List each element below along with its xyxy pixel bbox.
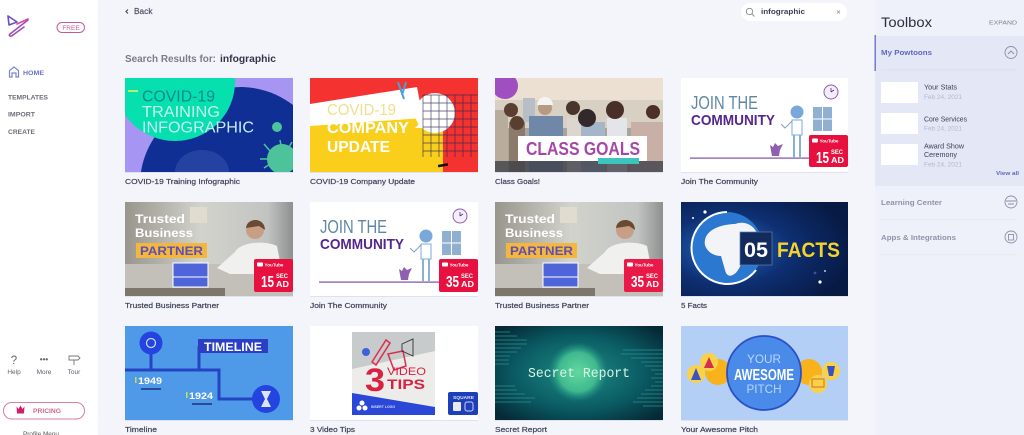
card: Trusted Business Partner 15: Trusted	[135, 212, 185, 226]
label: Your Awesome Pitch	[681, 425, 758, 434]
card: 5 Facts: 05	[744, 239, 768, 262]
card: Trusted Business Partner 35: PARTNER	[510, 244, 573, 258]
card: Secret Report: Secret Report	[528, 367, 630, 382]
section: my powtoons: My Powtoons	[881, 48, 932, 57]
section: apps and integrations	[881, 231, 1017, 243]
card: COVID-19 Training Infographic: INFOGRAPHIC	[142, 120, 254, 136]
card: Join The Community 15	[681, 78, 848, 186]
card: Trusted Business Partner 35: Business	[505, 226, 563, 240]
nav: create: CREATE	[8, 129, 36, 136]
panel: toolbox	[874, 0, 1024, 435]
heading: toolbox: Toolbox	[881, 15, 932, 30]
item: award show ceremony: Award Show	[924, 144, 965, 150]
card: Your Awesome Pitch	[681, 326, 848, 434]
card: Trusted Business Partner 15	[125, 202, 293, 310]
nav: home: HOME	[23, 70, 45, 77]
card: Trusted Business Partner 35: 35	[631, 274, 644, 291]
free badge	[57, 22, 84, 32]
card: Trusted Business Partner 15: PARTNER	[140, 244, 203, 258]
card: Your Awesome Pitch: AWESOME	[734, 367, 794, 384]
pricing button	[4, 402, 84, 419]
section: my powtoons	[874, 35, 1024, 186]
card: 3 Video Tips: VIDEO	[387, 366, 427, 378]
heading: search results: infographic	[220, 54, 276, 65]
card: Join The Community 15: COMMUNITY	[691, 112, 775, 129]
back link	[126, 7, 154, 16]
search box	[741, 3, 847, 21]
card: 3 Video Tips: SQUARE	[453, 395, 474, 400]
item: award show ceremony: Feb 24, 2021	[924, 162, 963, 168]
card: Join The Community 35: JOIN THE	[320, 217, 387, 237]
card: Join The Community 35: 35	[446, 274, 459, 291]
view all link: View all	[996, 171, 1019, 177]
pricing button: PRICING	[33, 408, 61, 415]
icon: logo	[8, 16, 28, 36]
card: COVID-19 Company Update: UPDATE	[327, 139, 390, 156]
more	[37, 355, 52, 376]
card: COVID-19 Training Infographic: TRAINING	[142, 104, 220, 121]
label: Join The Community	[310, 301, 387, 310]
icon: home	[10, 67, 18, 77]
label: 5 Facts	[681, 301, 707, 310]
card: 5 Facts: FACTS	[777, 239, 840, 262]
card: 3 Video Tips: TIPS	[387, 376, 425, 392]
item: core services: Core Services	[924, 116, 967, 124]
item: award show ceremony: Ceremony	[924, 152, 958, 159]
card: Your Awesome Pitch: PITCH	[746, 382, 782, 396]
tour: Tour	[68, 369, 81, 376]
card: COVID-19 Company Update: COVID-19	[327, 102, 396, 119]
card: Timeline: TIMELINE	[204, 340, 262, 354]
card: Join The Community 15: AD	[831, 156, 844, 165]
card: COVID-19 Company Update	[310, 78, 478, 186]
card: Join The Community 35	[310, 202, 478, 310]
help: ?	[11, 355, 17, 367]
card: Trusted Business Partner 35	[495, 202, 663, 310]
heading: search results: Search Results for:	[125, 54, 216, 65]
heading: search results	[125, 54, 276, 65]
card: Join The Community 15: JOIN THE	[691, 93, 758, 113]
help: Help	[7, 369, 21, 376]
card: 3 Video Tips	[310, 326, 478, 434]
card: Join The Community 35: AD	[461, 280, 474, 289]
search box: infographic	[761, 7, 805, 16]
section: learning center	[881, 196, 1017, 208]
left sidebar	[0, 0, 98, 435]
label: Secret Report	[495, 425, 548, 434]
more: •••	[40, 355, 48, 364]
expand link: EXPAND	[989, 20, 1017, 26]
label: 3 Video Tips	[310, 425, 355, 434]
item: your stats: Feb 24, 2021	[924, 94, 963, 101]
card: Secret Report	[495, 326, 663, 434]
item: core services	[881, 113, 967, 134]
card: Timeline: 1949	[138, 376, 162, 386]
card: Trusted Business Partner 35: AD	[646, 280, 659, 289]
card: Trusted Business Partner 35: SEC	[646, 274, 659, 280]
more: More	[37, 369, 52, 376]
card: COVID-19 Training Infographic	[115, 23, 297, 186]
card: COVID-19 Training Infographic: COVID-19	[142, 88, 215, 106]
item: your stats	[881, 82, 963, 103]
tour	[68, 356, 81, 376]
card: COVID-19 Company Update: COMPANY	[327, 120, 410, 137]
card: Class Goals: CLASS GOALS	[526, 139, 640, 159]
card: Join The Community 15: 15	[816, 150, 829, 167]
card: Timeline: 1924	[189, 391, 213, 401]
nav: import: IMPORT	[8, 112, 35, 118]
card: Class Goals	[492, 73, 665, 186]
label: Class Goals!	[495, 177, 540, 186]
card: Your Awesome Pitch: YOUR	[747, 352, 781, 366]
back link: Back	[134, 7, 154, 16]
card: Timeline	[125, 326, 293, 434]
item: your stats: Your Stats	[924, 84, 958, 92]
card: 3 Video Tips: INSERT LOGO	[371, 405, 395, 409]
label: COVID-19 Company Update	[310, 177, 415, 186]
label: Timeline	[125, 425, 157, 434]
item: award show ceremony	[881, 144, 965, 168]
card: Trusted Business Partner 35: Trusted	[505, 212, 555, 226]
free badge: FREE	[62, 25, 80, 32]
card: Join The Community 35: SEC	[461, 274, 474, 280]
card: Join The Community 15: SEC	[831, 150, 844, 156]
card: Trusted Business Partner 15: Business	[135, 226, 193, 240]
label: Join The Community	[681, 177, 758, 186]
item: core services: Feb 24, 2021	[924, 126, 963, 132]
section: learning center: Learning Center	[881, 198, 942, 207]
card: Trusted Business Partner 15: AD	[276, 280, 289, 289]
label: Trusted Business Partner	[125, 301, 220, 310]
card: Trusted Business Partner 15: 15	[261, 274, 274, 291]
card: 3 Video Tips: 3	[365, 362, 385, 398]
card: Join The Community 35: COMMUNITY	[320, 236, 404, 253]
nav: templates: TEMPLATES	[8, 94, 49, 102]
help	[7, 355, 21, 376]
label: COVID-19 Training Infographic	[125, 177, 240, 186]
label: Trusted Business Partner	[495, 301, 590, 310]
section: apps and integrations: Apps & Integrations	[881, 233, 956, 242]
card: Trusted Business Partner 15: SEC	[276, 274, 289, 280]
card: 5 Facts	[681, 202, 848, 310]
